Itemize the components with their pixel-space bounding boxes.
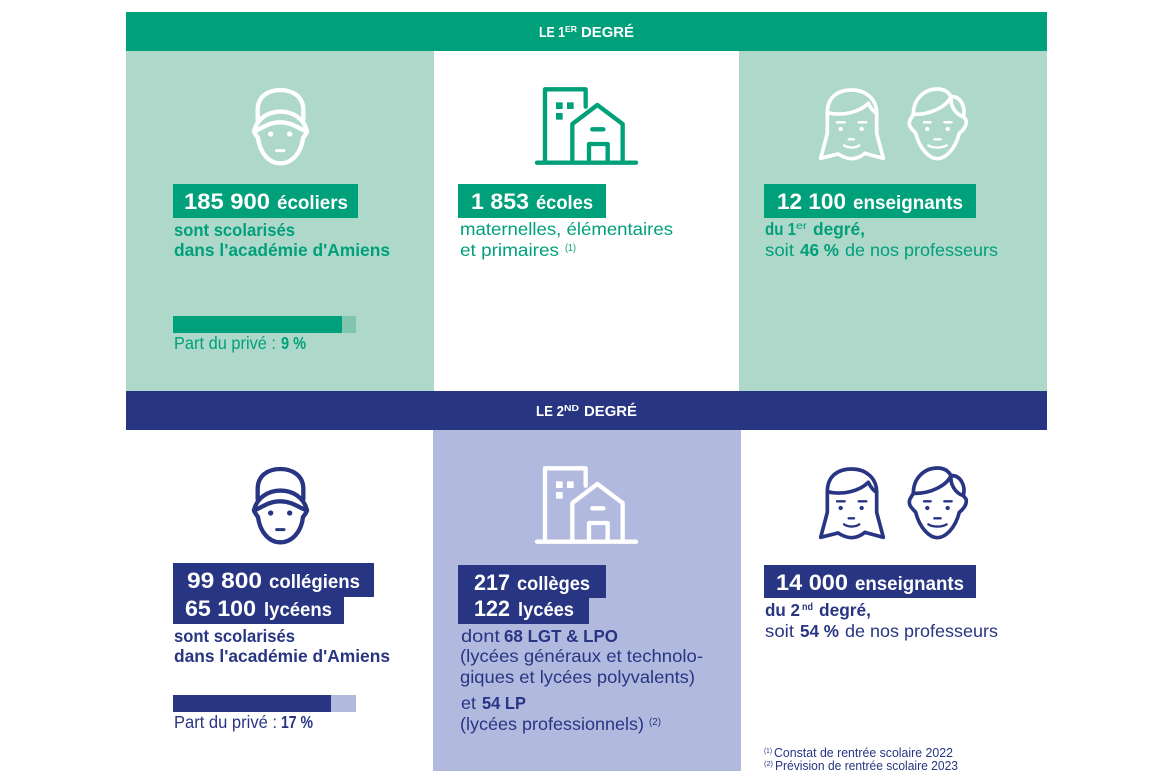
label: 217 collèges, 122 lycées: 217 — [474, 570, 510, 595]
label: 217 collèges, 122 lycées — [458, 565, 606, 624]
footnotes: (2) — [764, 761, 773, 768]
panel: 1st degree students — [126, 51, 434, 391]
text: school breakdown: (lycées généraux et technolo- — [460, 646, 703, 666]
label: 99 800 collégiens, 65 100 lycéens — [173, 563, 374, 624]
text: school breakdown — [460, 626, 703, 734]
text: school breakdown: 54 LP — [482, 693, 526, 713]
text: part du privé 17 %: 17 % — [281, 712, 313, 732]
heading: le 2nd degré: LE 2 — [536, 404, 564, 420]
text: sont scolarisés dans l'académie d'Amiens, navy: sont scolarisés — [174, 626, 295, 646]
text: du 1er degré, soit 46 % de nos professeurs — [765, 219, 998, 260]
heading: le 1er degré: LE 1 — [539, 25, 565, 41]
panel: 2nd degree students — [173, 469, 390, 732]
text: sont scolarisés dans l'académie d'Amiens, navy — [174, 626, 390, 666]
icon: female and male teachers — [821, 89, 966, 159]
heading: le 1er degré — [126, 12, 1047, 51]
icon: female and male teachers, navy — [821, 468, 966, 538]
footnotes: Constat de rentrée scolaire 2022 — [774, 746, 953, 760]
text: school breakdown: 68 LGT & LPO — [504, 626, 618, 646]
label: 185 900 écoliers — [173, 184, 358, 218]
label: 14 000 enseignants: 14 000 — [776, 570, 848, 595]
heading: le 1er degré: DEGRÉ — [581, 24, 634, 41]
icon: student with cap, navy — [254, 469, 307, 542]
text: maternelles, élémentaires et primaires: (1) — [565, 243, 576, 254]
text: maternelles, élémentaires et primaires: et primaires — [460, 240, 559, 260]
text: maternelles, élémentaires et primaires: maternelles, élémentaires — [460, 219, 673, 239]
text: du 2nd degré, soit 54 % de nos professeurs: nd — [802, 602, 813, 613]
panel: 2nd degree schools — [433, 430, 741, 771]
text: du 2nd degré, soit 54 % de nos professeurs: du 2 — [765, 600, 800, 620]
panel: 1st degree teachers — [739, 51, 1047, 391]
text: sont scolarisés dans l'académie d'Amiens: sont scolarisés — [174, 220, 295, 240]
text: du 2nd degré, soit 54 % de nos professeurs: soit — [765, 621, 794, 641]
text: school breakdown: (2) — [649, 717, 661, 728]
label: 185 900 écoliers: 185 900 — [184, 189, 270, 214]
label: 217 collèges, 122 lycées: collèges — [517, 574, 590, 595]
bar chart: share of private schools 9% — [173, 316, 356, 333]
label: 14 000 enseignants: enseignants — [855, 574, 964, 595]
text: school breakdown: (lycées professionnels) — [460, 714, 644, 734]
icon: student with cap — [254, 90, 307, 163]
label: 217 collèges, 122 lycées: 122 — [474, 596, 510, 621]
text: du 1er degré, soit 46 % de nos professeurs: 46 % — [800, 240, 839, 260]
label: 14 000 enseignants — [764, 565, 976, 598]
text: school breakdown: et — [461, 693, 476, 713]
panel: 2nd degree teachers — [764, 468, 998, 773]
text: du 2nd degré, soit 54 % de nos professeurs: de nos professeurs — [845, 621, 998, 641]
label: 12 100 enseignants — [764, 184, 976, 218]
heading: le 1er degré: ER — [565, 24, 577, 34]
footnotes: (1) — [764, 748, 772, 755]
label: 99 800 collégiens, 65 100 lycéens: 65 100 — [185, 596, 256, 621]
text: sont scolarisés dans l'académie d'Amiens: dans l'académie d'Amiens — [174, 240, 390, 260]
text: part du privé 17 %: Part du privé : — [174, 712, 277, 732]
text: school breakdown: giques et lycées polyvalents) — [460, 667, 695, 687]
label: 12 100 enseignants: 12 100 — [777, 189, 846, 214]
text: du 1er degré, soit 46 % de nos professeurs: soit — [765, 240, 794, 260]
label: 12 100 enseignants: enseignants — [853, 193, 963, 214]
text: du 2nd degré, soit 54 % de nos professeurs: degré, — [819, 600, 871, 620]
heading: le 2nd degré — [126, 391, 1047, 430]
icon: school buildings, white — [537, 468, 636, 542]
heading: le 2nd degré: DEGRÉ — [584, 403, 637, 420]
text: sont scolarisés dans l'académie d'Amiens, navy: dans l'académie d'Amiens — [174, 646, 390, 666]
text: du 1er degré, soit 46 % de nos professeurs: de nos professeurs — [845, 240, 998, 260]
label: 99 800 collégiens, 65 100 lycéens: 99 800 — [187, 568, 262, 593]
label: 1 853 écoles: écoles — [536, 193, 593, 214]
label: 99 800 collégiens, 65 100 lycéens: collégiens — [269, 572, 360, 593]
bar chart: share of private schools 17% — [173, 695, 356, 712]
text: du 2nd degré, soit 54 % de nos professeurs — [765, 600, 998, 641]
label: 99 800 collégiens, 65 100 lycéens: lycéens — [264, 600, 332, 621]
text: part du privé 9 %: 9 % — [281, 333, 306, 353]
label: 185 900 écoliers: écoliers — [277, 193, 348, 214]
text: du 1er degré, soit 46 % de nos professeurs: er — [796, 221, 808, 232]
footnotes: Prévision de rentrée scolaire 2023 — [775, 759, 958, 773]
label: 1 853 écoles: 1 853 — [471, 189, 529, 214]
text: du 1er degré, soit 46 % de nos professeurs: degré, — [813, 219, 865, 239]
footnotes — [764, 746, 958, 773]
text: du 2nd degré, soit 54 % de nos professeurs: 54 % — [800, 621, 839, 641]
text: school breakdown: dont — [461, 626, 500, 646]
panel: 1st degree schools — [434, 51, 739, 391]
label: 1 853 écoles — [458, 184, 606, 218]
text: maternelles, élémentaires et primaires — [460, 219, 673, 260]
icon: school buildings — [537, 89, 636, 163]
label: 217 collèges, 122 lycées: lycées — [518, 600, 574, 621]
text: part du privé 9 %: Part du privé : — [174, 333, 276, 353]
text: sont scolarisés dans l'académie d'Amiens — [174, 220, 390, 260]
text: du 1er degré, soit 46 % de nos professeurs: du 1 — [765, 219, 796, 239]
heading: le 2nd degré: ND — [564, 403, 579, 413]
